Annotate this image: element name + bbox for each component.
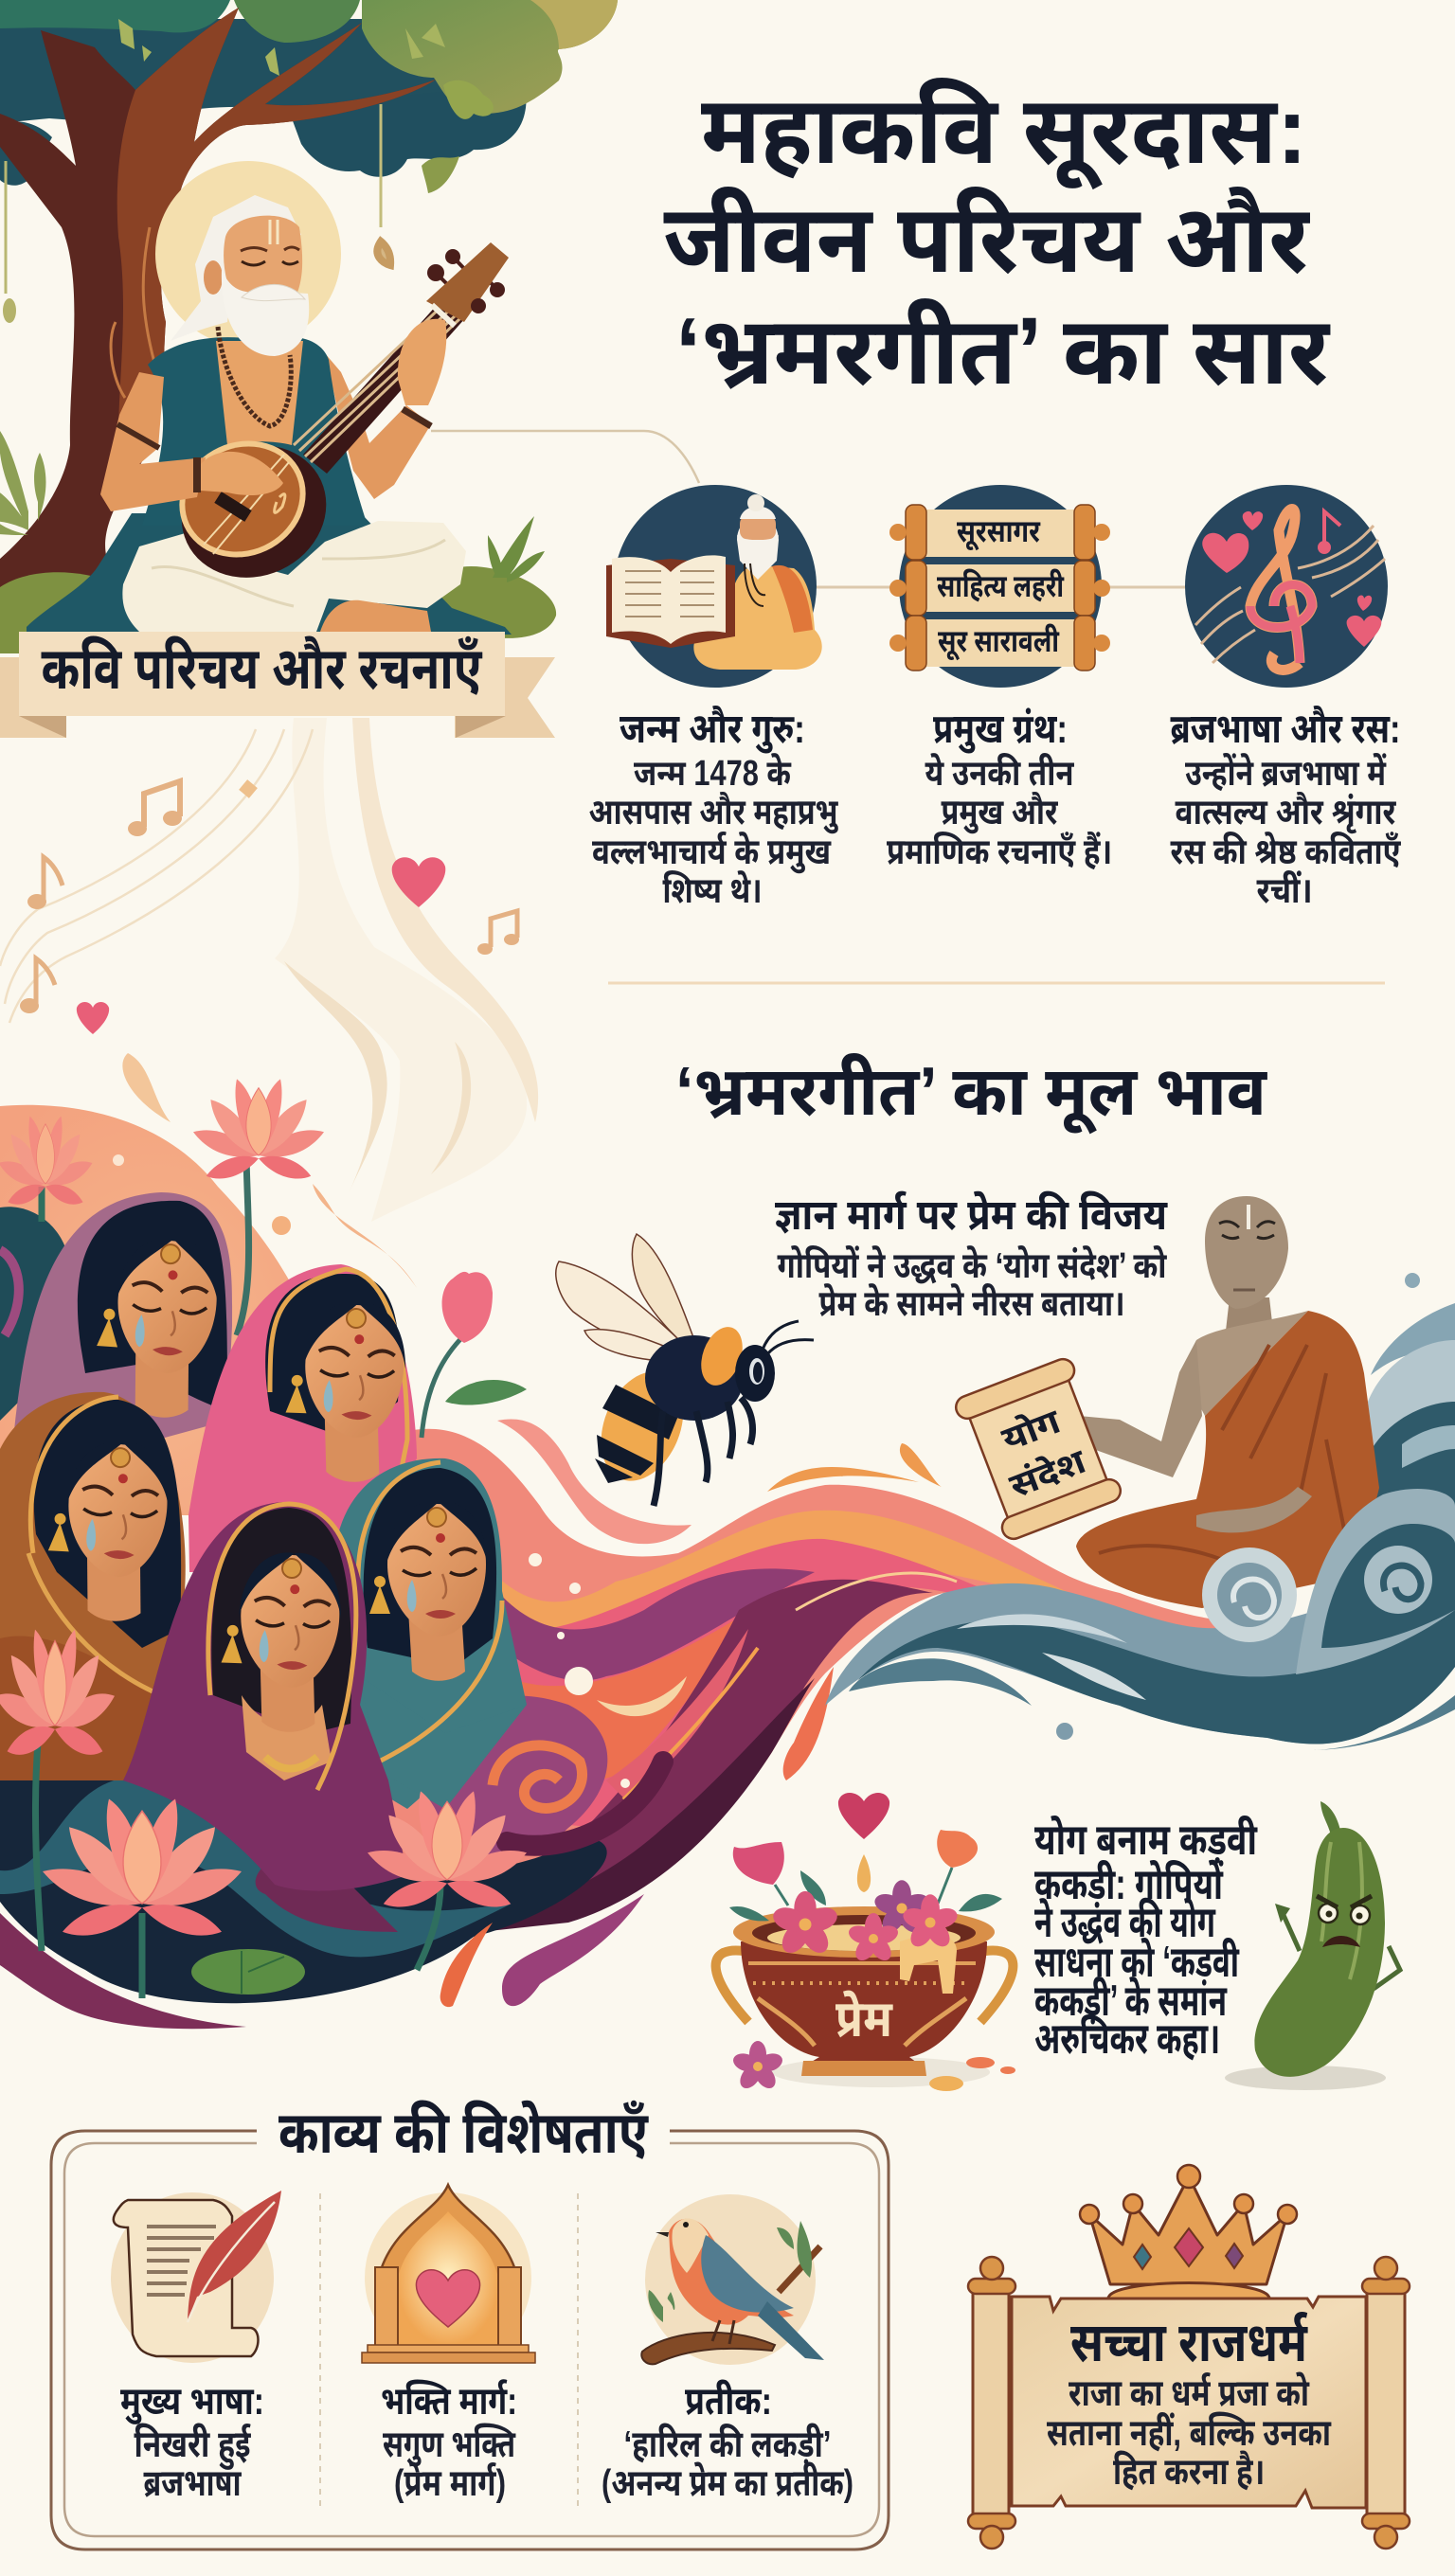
- gopi: front centre: [123, 1502, 407, 1891]
- feature text: main language: निखरी हुई: [135, 2424, 251, 2470]
- scroll: sahitya lahari: [889, 561, 1110, 616]
- illustration: poet Surdas tree canopy: [0, 0, 618, 193]
- icons: musical notes, hearts and droplet: [20, 779, 519, 1122]
- icon: scroll and quill: [111, 2191, 281, 2363]
- panel: poetic features: [51, 2099, 889, 2549]
- scroll: sursagar: सूरसागर: [957, 513, 1041, 551]
- scroll body: [1047, 2372, 1332, 2493]
- scroll: sahitya lahari: साहित्य लहरी: [937, 568, 1065, 603]
- text column: brajbhasha and rasa: [1171, 706, 1401, 911]
- scroll text: sandesh: संदेश: [1004, 1440, 1091, 1506]
- illustration: dark wave base with swirl: [0, 1591, 663, 2029]
- gopi: back left: [14, 1192, 232, 1449]
- feature text: symbol: ‘हारिल की लकड़ी’: [623, 2424, 832, 2465]
- panel title: काव्य की विशेषताएँ: [278, 2099, 649, 2166]
- text block: yoga versus bitter cucumber: अरुचिकर कहा।: [1034, 2013, 1220, 2063]
- feature text: path of devotion: भक्ति मार्ग:: [381, 2379, 517, 2423]
- icon circle: three scrolls: [889, 485, 1110, 688]
- text column: main works: प्रमाणिक रचनाएँ हैं।: [887, 831, 1112, 872]
- bowl shadow: [772, 2057, 990, 2087]
- icon: crown: [1080, 2165, 1297, 2299]
- feature text: symbol: [602, 2379, 853, 2504]
- right arm: [100, 372, 206, 511]
- ribbon banner: [0, 632, 555, 738]
- left arm behind: [325, 353, 431, 499]
- feature text: path of devotion: [381, 2379, 517, 2504]
- text column: brajbhasha and rasa: रस की श्रेष्ठ कविताएँ: [1171, 831, 1401, 872]
- flowers and heart: [729, 1793, 1015, 2092]
- illustration: pink hill behind gopis: [0, 1105, 417, 1515]
- scroll heading: सच्चा राजधर्म: [1070, 2312, 1308, 2373]
- gopi: right: [338, 1458, 527, 1809]
- scroll body: सताना नहीं, बल्कि उनका: [1047, 2412, 1332, 2454]
- text column: main works: प्रमुख ग्रंथ:: [933, 707, 1068, 753]
- parchment: [1012, 2297, 1366, 2508]
- text block: yoga versus bitter cucumber: ककड़ी: गोपियों: [1034, 1859, 1224, 1908]
- bowl handles: [716, 1950, 1013, 2022]
- text column: main works: प्रमुख और: [942, 791, 1058, 834]
- feature text: path of devotion: सगुण भक्ति: [383, 2424, 516, 2467]
- text block: yoga versus bitter cucumber: ककड़ी’ के समान: [1034, 1975, 1227, 2025]
- text block: victory of love: ज्ञान मार्ग पर प्रेम की विजय: [775, 1190, 1168, 1239]
- main title: ‘भ्रमरगीत’ का सार: [675, 298, 1331, 404]
- feature text: path of devotion: (प्रेम मार्ग): [394, 2462, 506, 2504]
- text column: brajbhasha and rasa: रचीं।: [1256, 869, 1313, 911]
- panel: true royal duty scroll: [968, 2257, 1410, 2549]
- connector lines between circles: [815, 585, 1186, 589]
- text column: birth and guru: वल्लभाचार्य के प्रमुख: [592, 831, 832, 874]
- illustration: meditating monk Uddhav: [1061, 1196, 1379, 1608]
- text column: main works: [887, 707, 1112, 872]
- robe base: [27, 513, 512, 635]
- illustration: flowing ribbon of love: [322, 1419, 1238, 1937]
- scroll: sursagar: [889, 505, 1110, 560]
- bowl label: प्रेम: [835, 1990, 893, 2048]
- bowl body: [741, 1941, 987, 2075]
- feature text: main language: [120, 2379, 264, 2504]
- text block: victory of love: प्रेम के सामने नीरस बताया।: [818, 1282, 1125, 1324]
- illustration: grey blue waves in front: [825, 1489, 1455, 1750]
- scroll rods: [968, 2257, 1410, 2549]
- icon: temple arch with heart: [362, 2185, 535, 2363]
- text column: brajbhasha and rasa: उन्होंने ब्रजभाषा में: [1185, 752, 1387, 794]
- right mound: [417, 516, 556, 638]
- connector line from poet to circles: [431, 431, 699, 483]
- illustration: lotus flowers: [0, 1079, 527, 1998]
- icon: bird on branch: [641, 2194, 824, 2365]
- banner title: कवि परिचय और रचनाएँ: [42, 635, 483, 702]
- illustration: grey blue waves behind monk: [1368, 1273, 1455, 1534]
- hair and head: [171, 195, 301, 341]
- scroll: sur saravali: सूर सारावली: [938, 623, 1060, 661]
- dhoti: [122, 521, 466, 632]
- illustration: bumblebee: [556, 1234, 814, 1506]
- main title: [663, 78, 1331, 404]
- illustration: tree trunk and branches: [0, 8, 436, 608]
- text block: yoga versus bitter cucumber: ने उद्धव की योग: [1034, 1896, 1216, 1946]
- scroll body: राजा का धर्म प्रजा को: [1069, 2372, 1310, 2414]
- left foliage: [0, 431, 45, 535]
- scroll text: yog: योग: [997, 1401, 1066, 1458]
- icon circle: sage with book: [606, 485, 822, 688]
- illustration: Surdas playing veena: [0, 161, 556, 653]
- text column: birth and guru: जन्म और गुरु:: [620, 706, 805, 753]
- scroll: sur saravali: [889, 616, 1110, 671]
- forearm hand: [398, 319, 446, 405]
- vest torso: [142, 337, 368, 526]
- halo: [155, 161, 341, 347]
- music staff flow and cream ribbons: [0, 718, 538, 1222]
- illustration: small orange splash: [767, 1443, 942, 1492]
- text column: main works: ये उनकी तीन: [925, 752, 1074, 794]
- feature text: main language: ब्रजभाषा: [144, 2463, 242, 2504]
- feature text: symbol: प्रतीक:: [685, 2379, 772, 2423]
- gopi: back right: [189, 1264, 417, 1572]
- text block: yoga versus bitter cucumber: साधना को ‘कड़वी: [1034, 1937, 1240, 1986]
- illustration: five weeping gopis: [0, 1192, 527, 1891]
- scroll body: हित करना है।: [1113, 2451, 1265, 2493]
- icon: yoga message scroll: [953, 1356, 1123, 1542]
- main title: महाकवि सूरदास:: [701, 78, 1307, 190]
- text block: victory of love: [775, 1190, 1168, 1324]
- text column: brajbhasha and rasa: ब्रजभाषा और रस:: [1171, 706, 1400, 752]
- icon circle: treble clef and hearts: [1185, 485, 1388, 688]
- text column: birth and guru: जन्म 1478 के: [634, 752, 792, 794]
- text column: birth and guru: शिष्य थे।: [663, 869, 762, 911]
- icon: angry cucumber: [1225, 1801, 1400, 2090]
- text block: victory of love: गोपियों ने उद्धव के ‘योग संदेश’ को: [777, 1244, 1167, 1286]
- panel frame: [51, 2131, 889, 2549]
- text block: yoga versus bitter cucumber: [1034, 1815, 1258, 2063]
- ground mound: [0, 572, 189, 653]
- feature text: symbol: (अनन्य प्रेम का प्रतीक): [602, 2462, 853, 2504]
- gopi: middle left: [0, 1392, 186, 1780]
- feet: [320, 600, 431, 632]
- icon: bowl of love: [716, 1793, 1015, 2092]
- text block: yoga versus bitter cucumber: योग बनाम कड़वी: [1034, 1815, 1258, 1864]
- section heading: ‘भ्रमरगीत’ का मूल भाव: [675, 1053, 1267, 1135]
- text column: birth and guru: [589, 706, 839, 911]
- main title: जीवन परिचय और: [663, 187, 1310, 293]
- section divider: [608, 981, 1385, 985]
- text column: birth and guru: आसपास और महाप्रभु: [589, 791, 839, 834]
- text column: brajbhasha and rasa: वात्सल्य और श्रृंगार: [1175, 791, 1397, 834]
- feature text: main language: मुख्य भाषा:: [120, 2379, 264, 2424]
- veena: [160, 242, 509, 601]
